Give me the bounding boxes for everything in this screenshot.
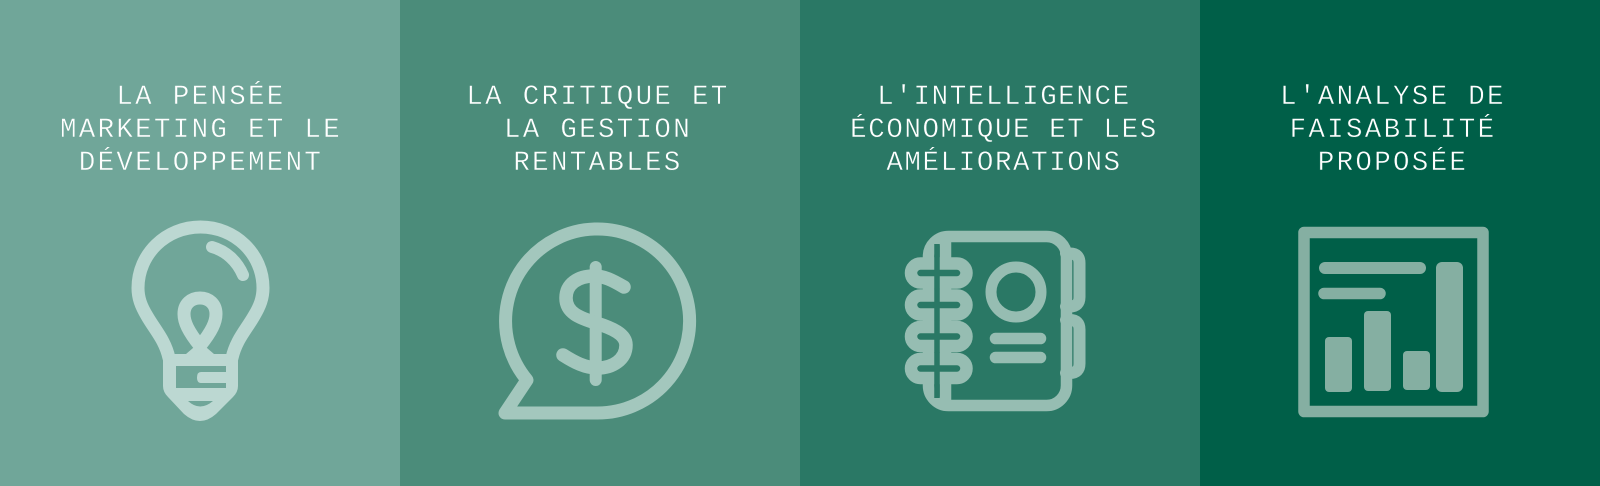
icon: light bulb bbox=[138, 227, 263, 421]
panel: la pensée marketing bbox=[0, 0, 400, 486]
panel: la critique et la gestion bbox=[400, 0, 800, 486]
heading: l'analyse de faisabilité: PROPOSÉE bbox=[1318, 148, 1468, 179]
heading: l'intelligence économique bbox=[850, 82, 1158, 179]
heading: l'analyse de faisabilité: FAISABILITÉ bbox=[1290, 115, 1496, 146]
heading: la critique et la gestion: RENTABLES bbox=[513, 148, 683, 179]
heading: la pensée marketing: DÉVELOPPEMENT bbox=[79, 148, 323, 179]
icon: speech bubble with dollar bbox=[505, 229, 690, 413]
heading: l'analyse de faisabilité: L'ANALYSE DE bbox=[1280, 82, 1506, 113]
panel: l'analyse de faisabilité bbox=[1200, 0, 1600, 486]
heading: la critique et la gestion bbox=[466, 82, 730, 179]
heading: l'analyse de faisabilité bbox=[1280, 82, 1506, 179]
heading: la pensée marketing: LA PENSÉE bbox=[116, 82, 286, 113]
icon: spiral notebook bbox=[911, 236, 1080, 406]
heading: la pensée marketing: MARKETING ET LE bbox=[60, 115, 342, 146]
heading: la critique et la gestion: LA GESTION bbox=[504, 115, 692, 146]
heading: l'intelligence économique: AMÉLIORATIONS bbox=[886, 148, 1122, 179]
icon: bar chart board bbox=[1304, 232, 1483, 412]
heading: la pensée marketing bbox=[60, 81, 342, 179]
heading: l'intelligence économique: ÉCONOMIQUE ET LES bbox=[850, 115, 1158, 146]
heading: la critique et la gestion: LA CRITIQUE ET bbox=[466, 82, 730, 113]
heading: l'intelligence économique: L'INTELLIGENCE bbox=[877, 82, 1131, 113]
panel: l'intelligence économique bbox=[800, 0, 1200, 486]
